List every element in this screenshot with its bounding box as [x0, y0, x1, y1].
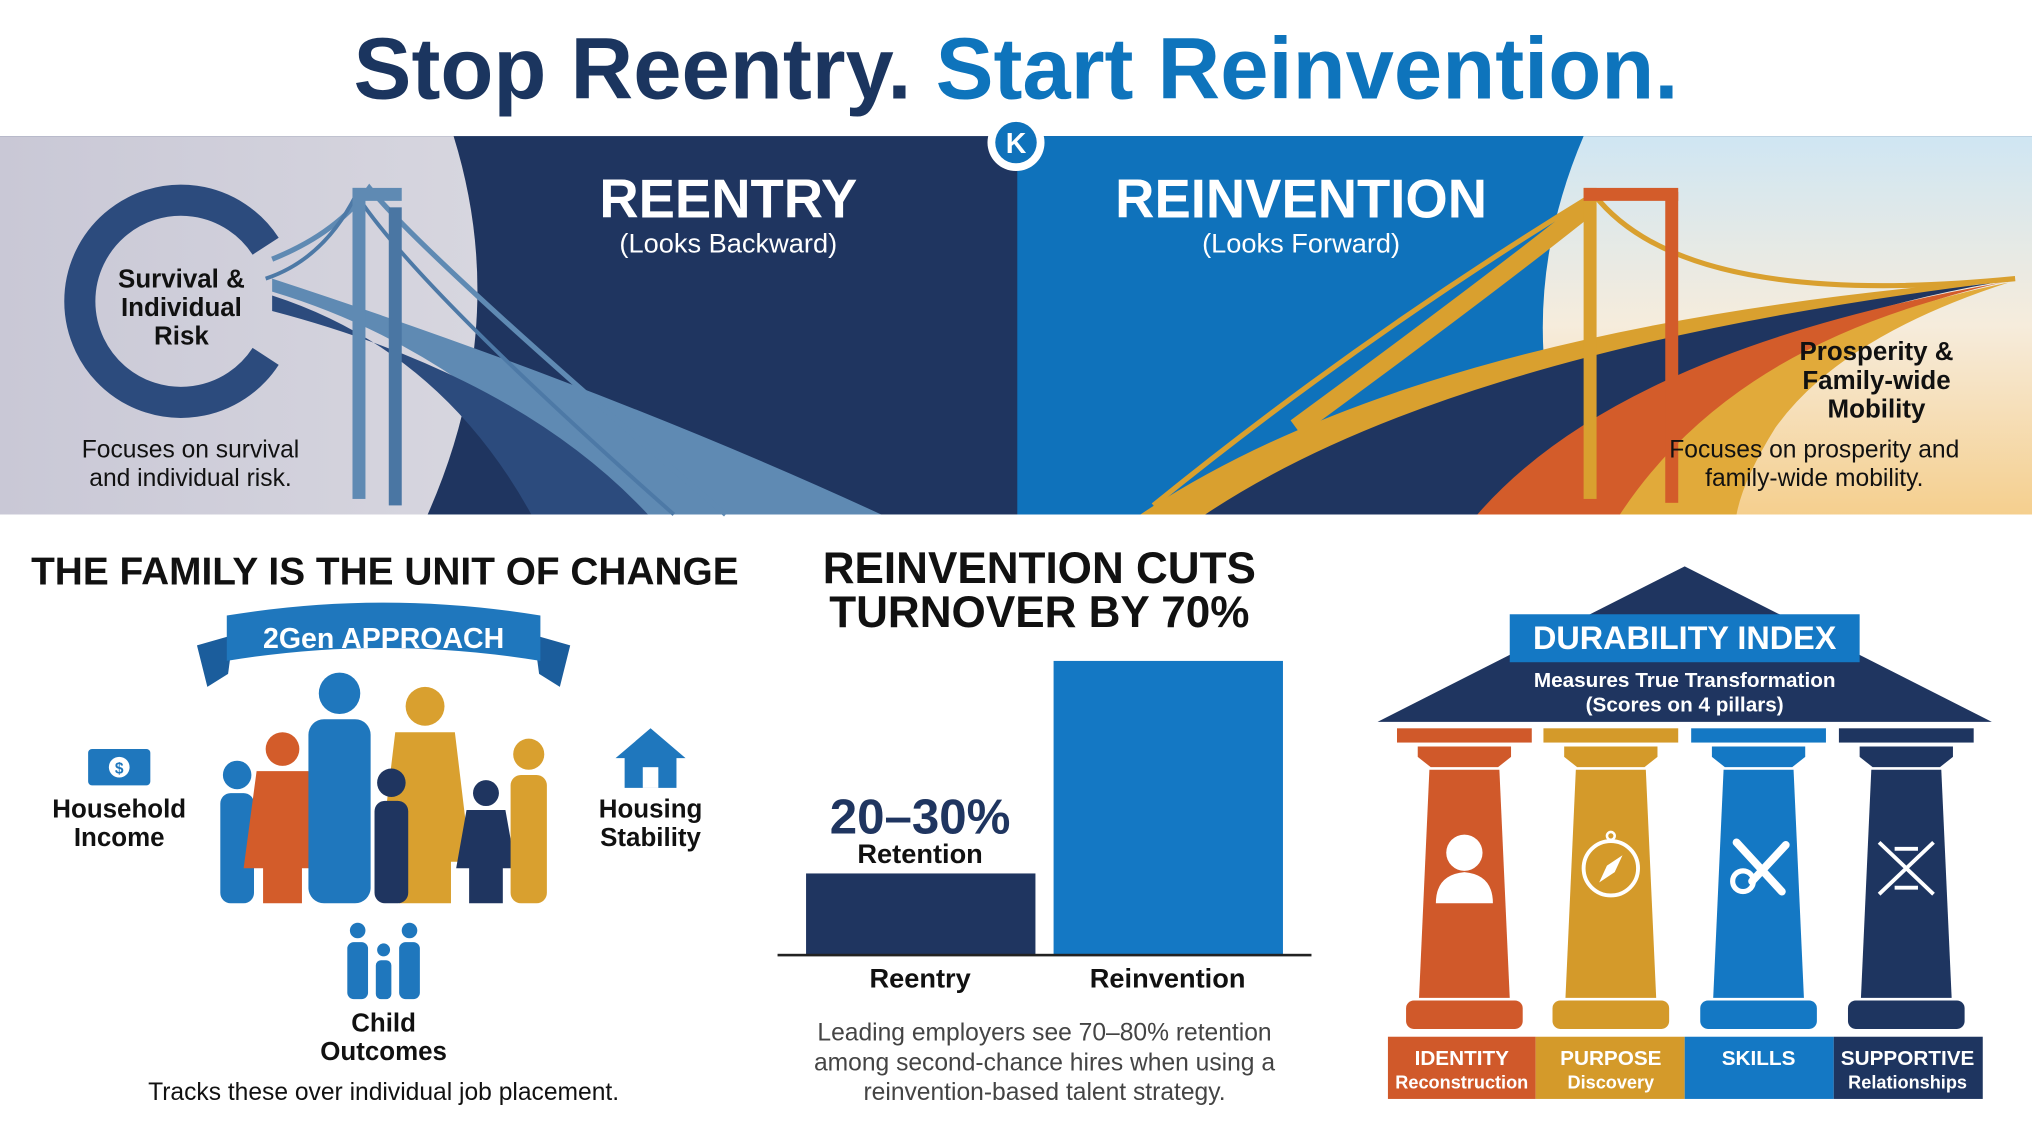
- icon: family figures: [220, 673, 547, 903]
- panel: family: [31, 550, 739, 1106]
- caption: family: Tracks these over individual job placement.: [148, 1079, 619, 1106]
- bar chart: [778, 661, 1311, 993]
- caption: turnover: [814, 1020, 1275, 1106]
- icon: logo: [987, 114, 1045, 171]
- icon: child outcomes: Outcomes: [320, 1038, 447, 1066]
- icon: child outcomes: Child: [351, 1010, 416, 1038]
- pillar: identity: [1388, 728, 1536, 1099]
- text: prosperity: Focuses on prosperity and: [1669, 436, 1959, 463]
- roof: (Scores on 4 pillars): [1586, 693, 1784, 716]
- heading: family: THE FAMILY IS THE UNIT OF CHANGE: [31, 550, 739, 593]
- pillar: supportive: Relationships: [1848, 1073, 1967, 1093]
- text: survival caption: Focuses on survival: [82, 436, 299, 463]
- panel: reentry vs reinvention band: [0, 114, 2032, 514]
- icon: housing: Housing: [599, 796, 702, 824]
- icon: survival ring: Risk: [154, 323, 209, 351]
- banner: 2Gen approach: 2Gen APPROACH: [263, 623, 504, 655]
- icon: housing: [599, 728, 702, 852]
- heading: turnover: REINVENTION CUTS: [823, 544, 1256, 593]
- bar chart: Reinvention: [1090, 962, 1245, 993]
- text: prosperity: Prosperity &: [1799, 338, 1954, 366]
- banner: 2Gen approach: [197, 603, 570, 687]
- pillar: identity: Reconstruction: [1395, 1073, 1528, 1093]
- heading: turnover: TURNOVER BY 70%: [829, 588, 1249, 637]
- text: survival caption: [82, 436, 299, 492]
- roof: DURABILITY INDEX: [1533, 620, 1837, 656]
- icon: household income: $: [115, 761, 124, 778]
- pillar: skills: [1685, 728, 1834, 1099]
- text: prosperity: family-wide mobility.: [1705, 465, 1923, 492]
- pillar: identity: IDENTITY: [1415, 1047, 1509, 1070]
- text: prosperity: [1669, 338, 1959, 492]
- panel: turnover chart: [778, 544, 1311, 1106]
- text: prosperity: Family-wide: [1802, 367, 1951, 395]
- bar chart: Retention: [857, 838, 983, 869]
- pillar: purpose: [1536, 728, 1685, 1099]
- panel: durability index: [1378, 566, 1992, 1099]
- text: survival caption: and individual risk.: [89, 465, 292, 492]
- icon: survival ring: Survival &: [118, 266, 245, 294]
- caption: turnover: reinvention-based talent strategy.: [863, 1079, 1226, 1106]
- icon: new bridge: [1140, 188, 2015, 514]
- pillar: supportive: [1834, 728, 1983, 1099]
- roof: Measures True Transformation: [1534, 669, 1836, 692]
- caption: turnover: Leading employers see 70–80% retention: [817, 1020, 1272, 1047]
- pillar: supportive: SUPPORTIVE: [1841, 1047, 1975, 1070]
- roof: [1378, 566, 1992, 722]
- bar chart: 20–30%: [830, 789, 1010, 844]
- panel: reentry vs reinvention band: (Looks Forward): [1202, 228, 1400, 259]
- text: reentry: REENTRY: [599, 169, 857, 230]
- pillar: purpose: PURPOSE: [1560, 1047, 1662, 1070]
- icon: logo: K: [1006, 128, 1027, 160]
- heading: turnover: [823, 544, 1256, 637]
- bar chart: Reentry: [869, 962, 971, 993]
- text: prosperity: Mobility: [1828, 395, 1926, 423]
- pillar: purpose: Discovery: [1567, 1073, 1654, 1093]
- icon: old bridge: [266, 188, 881, 514]
- caption: turnover: among second-chance hires when using a: [814, 1049, 1275, 1076]
- icon: housing: Stability: [600, 824, 702, 852]
- icon: household income: Household: [52, 796, 186, 824]
- icon: household income: Income: [74, 824, 165, 852]
- icon: survival ring: [80, 200, 266, 402]
- icon: survival ring: Individual: [121, 294, 242, 322]
- icon: household income: [52, 749, 186, 852]
- pillar: skills: SKILLS: [1722, 1047, 1796, 1070]
- panel: reentry vs reinvention band: (Looks Backward): [619, 228, 837, 259]
- icon: child outcomes: [320, 923, 447, 1066]
- text: reinvention: REINVENTION: [1115, 169, 1487, 230]
- title: Stop Reentry. Start Reinvention.: [354, 20, 1678, 117]
